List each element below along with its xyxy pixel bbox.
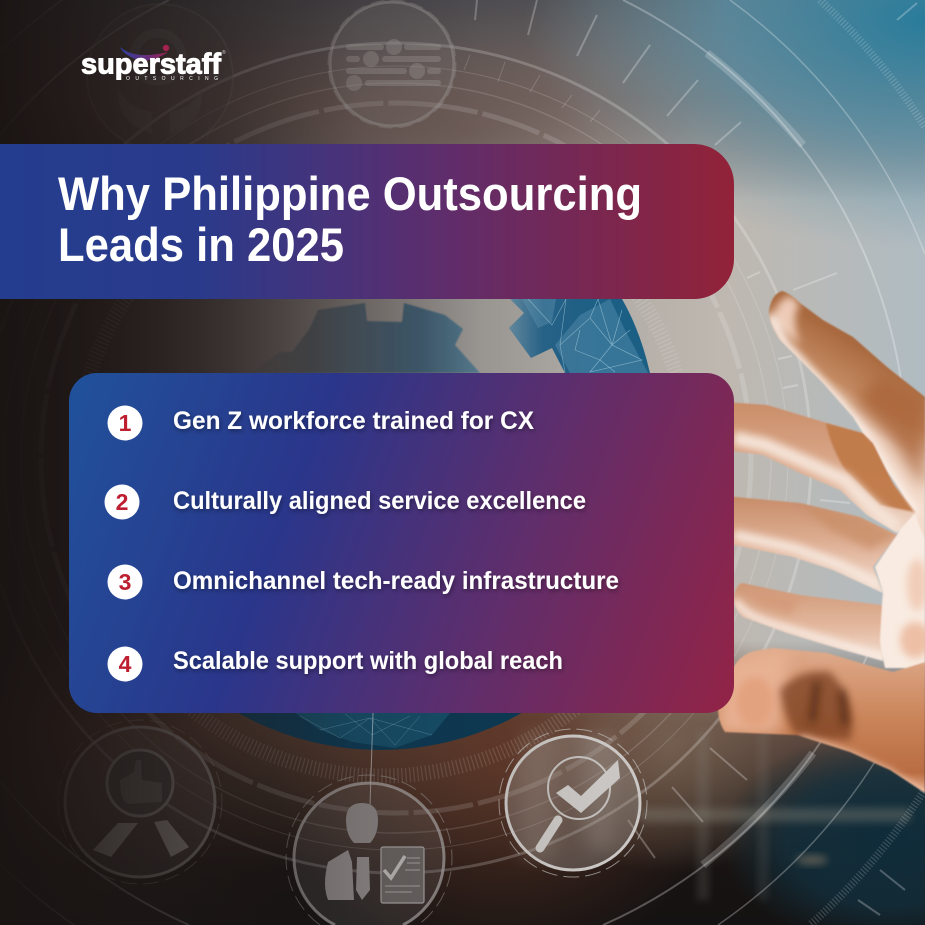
globe landmass mesh [295, 713, 450, 748]
palm [875, 470, 925, 668]
left darkening overlay [0, 0, 600, 925]
item 4 [108, 646, 563, 682]
icon: person with clipboard [286, 775, 452, 925]
icon: thumbs-up ribbon [58, 720, 222, 884]
item 2: Culturally aligned service excellence [173, 487, 586, 515]
item 2: 2 [116, 489, 128, 515]
item 1: Gen Z workforce trained for CX [173, 407, 534, 435]
title: Why Philippine Outsourcing [58, 167, 642, 220]
item 3: 3 [119, 569, 131, 595]
logo [81, 45, 226, 82]
title: Leads in 2025 [58, 218, 344, 271]
item 2 [104, 484, 586, 520]
logo swoosh [120, 47, 168, 60]
icon: magnifier with check [499, 729, 647, 877]
globe bottom [90, 460, 670, 750]
registered mark: ® [222, 49, 226, 56]
pinky finger [734, 582, 884, 662]
logo wordmark: superstaff [81, 48, 221, 80]
hand photo [715, 285, 925, 796]
index finger [760, 285, 925, 545]
thumb [715, 645, 925, 796]
icon: sliders circle [328, 0, 456, 128]
item 4: Scalable support with global reach [173, 647, 563, 675]
map of the Philippines [509, 299, 650, 373]
item 1: 1 [119, 410, 132, 436]
middle finger [725, 400, 920, 535]
globe gear top [252, 299, 650, 373]
title banner [0, 144, 734, 299]
item 1 [108, 406, 534, 440]
logo tagline: OUTSOURCING [126, 76, 218, 82]
item 4: 4 [119, 651, 132, 677]
title [58, 167, 642, 271]
item 3: Omnichannel tech-ready infrastructure [173, 567, 619, 595]
logo dot [163, 45, 169, 51]
item 3 [108, 564, 619, 600]
panel: reasons list [69, 373, 734, 713]
ring finger [725, 494, 900, 594]
icon: hands with gear [87, 4, 233, 150]
